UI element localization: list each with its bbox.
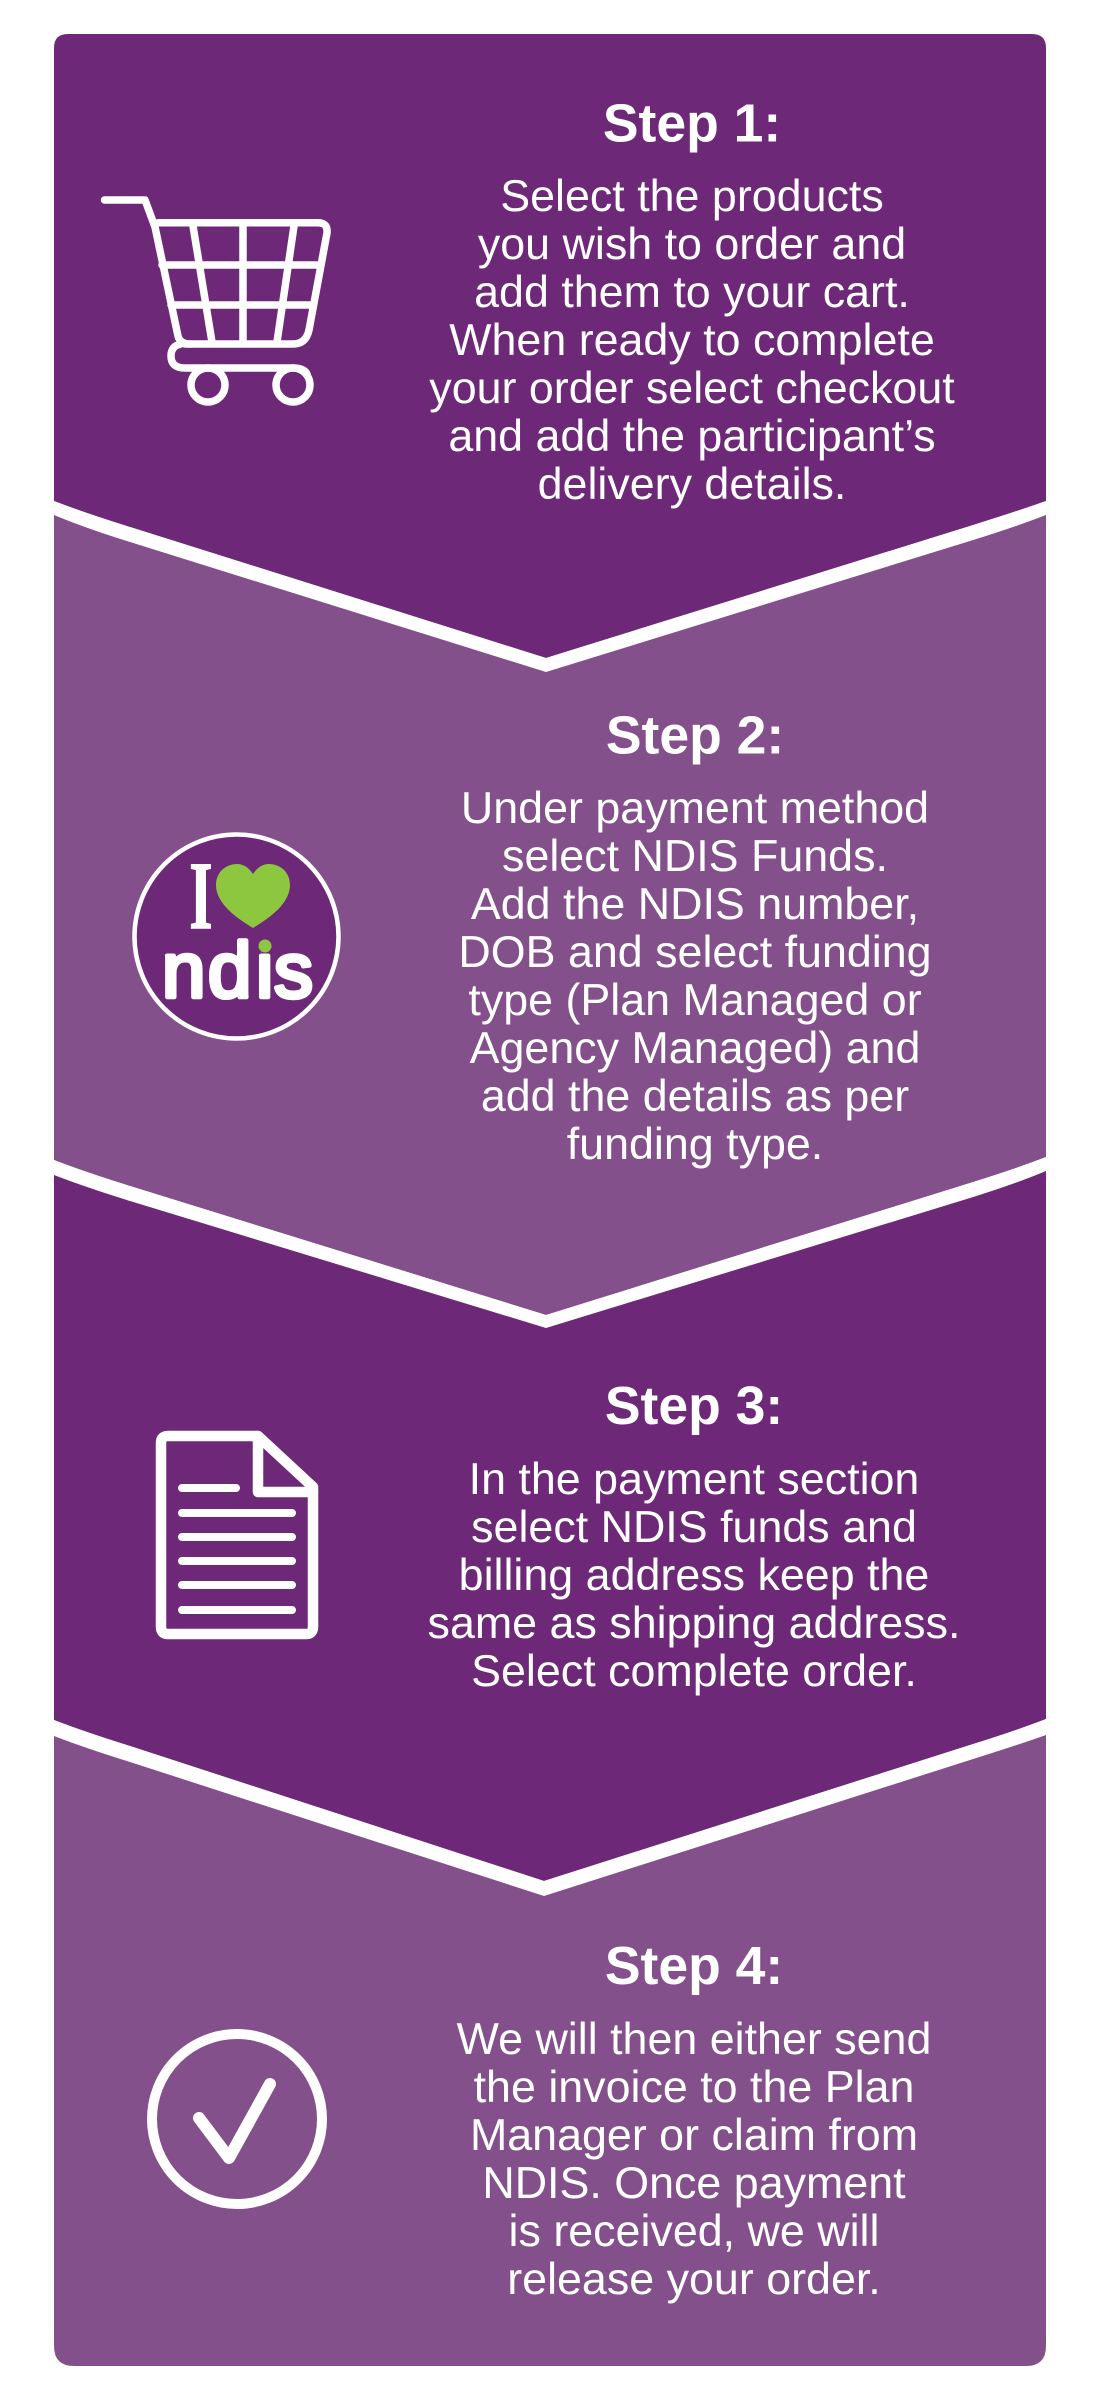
step 2 text bbox=[458, 783, 932, 1169]
icon: check mark bbox=[152, 2034, 322, 2204]
step 3 text: In the payment section bbox=[469, 1454, 919, 1504]
step 4 text bbox=[457, 2014, 931, 2304]
step 1 text: When ready to complete bbox=[449, 315, 935, 365]
step 1 text: delivery details. bbox=[538, 459, 846, 509]
step 1 text: add them to your cart. bbox=[474, 267, 910, 317]
step 1 heading: Step 1: bbox=[603, 94, 781, 154]
step 4 text: the invoice to the Plan bbox=[474, 2062, 914, 2112]
icon: I love NDIS badge bbox=[134, 834, 338, 1038]
step 4 text: Manager or claim from bbox=[470, 2110, 918, 2160]
panel 3 background bbox=[54, 1171, 1046, 1881]
step 1 text bbox=[429, 171, 955, 509]
step 4 text: NDIS. Once payment bbox=[482, 2158, 906, 2208]
step 2 text: select NDIS Funds. bbox=[502, 831, 888, 881]
panel: step 1 bbox=[54, 34, 1046, 658]
divider: chevron 2 bbox=[54, 1157, 1046, 1328]
step 2 text: funding type. bbox=[567, 1119, 823, 1169]
step 4 text: release your order. bbox=[507, 2254, 881, 2304]
step 4 heading: Step 4: bbox=[605, 1937, 783, 1996]
step 3 heading: Step 3: bbox=[605, 1377, 783, 1436]
divider: chevron 3 bbox=[54, 1719, 1046, 1896]
panel 2 background bbox=[54, 515, 1046, 1315]
step 2 text: type (Plan Managed or bbox=[468, 975, 922, 1025]
icon: document bbox=[161, 1436, 313, 1634]
step 1 text: Select the products bbox=[500, 171, 884, 221]
panel: step 4 bbox=[54, 1735, 1046, 2366]
step 2 text: add the details as per bbox=[481, 1071, 909, 1121]
step 1 text: and add the participant’s bbox=[448, 411, 936, 461]
panel: step 3 bbox=[54, 1171, 1046, 1881]
divider: chevron 1 bbox=[54, 501, 1046, 672]
panel 1 background bbox=[54, 34, 1046, 658]
step 3 text: billing address keep the bbox=[459, 1550, 929, 1600]
step 4 text: is received, we will bbox=[509, 2206, 879, 2256]
icon: shopping cart bbox=[104, 200, 327, 402]
step 1 text: your order select checkout bbox=[429, 363, 955, 413]
icon: I love NDIS badge: I bbox=[189, 844, 213, 950]
step 2 text: Agency Managed) and bbox=[470, 1023, 920, 1073]
panel: step 2 bbox=[54, 515, 1046, 1315]
step 2 text: DOB and select funding bbox=[458, 927, 932, 977]
step 3 text bbox=[428, 1454, 960, 1696]
step 3 text: same as shipping address. bbox=[428, 1598, 960, 1648]
step 3 text: Select complete order. bbox=[471, 1646, 917, 1696]
step 3 text: select NDIS funds and bbox=[471, 1502, 917, 1552]
step 4 text: We will then either send bbox=[457, 2014, 931, 2064]
panel 4 background bbox=[54, 1735, 1046, 2366]
icon: I love NDIS badge: ndis bbox=[162, 926, 313, 1014]
step 2 text: Add the NDIS number, bbox=[471, 879, 919, 929]
step 2 text: Under payment method bbox=[461, 783, 929, 833]
step 2 heading: Step 2: bbox=[606, 706, 784, 766]
step 1 text: you wish to order and bbox=[478, 219, 906, 269]
